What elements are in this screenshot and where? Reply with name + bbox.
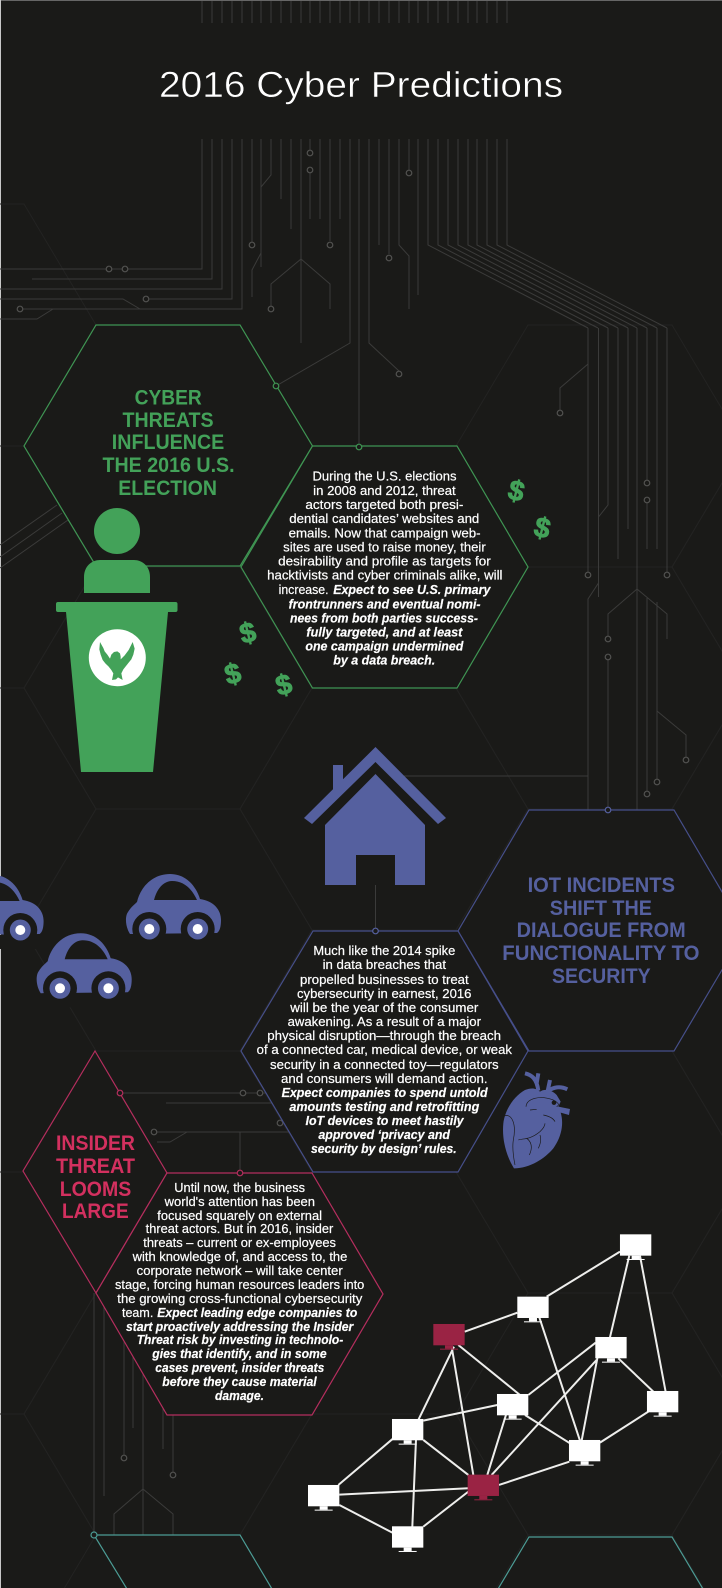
panel: insider threat body hexagon: threats – current or ex-employees [143, 1236, 336, 1250]
panel: teal hexagon right (cropped) [498, 1537, 703, 1588]
title: 2016 Cyber Predictions [159, 64, 563, 105]
panel: election body hexagon: During the U.S. elections [312, 470, 456, 484]
panel: IoT body hexagon: amounts testing and retrofitting [289, 1100, 480, 1114]
panel: IoT body hexagon: cybersecurity in earnest, 2016 [297, 987, 471, 1001]
panel: insider threat heading hexagon: LARGE [62, 1200, 129, 1223]
panel: IoT body hexagon: Much like the 2014 spike [313, 944, 455, 958]
panel: IoT heading hexagon: SHIFT THE [550, 897, 652, 920]
panel: insider threat body hexagon: before they cause material [162, 1375, 317, 1389]
panel: election body hexagon: frontrunners and eventual nomi- [289, 598, 481, 612]
panel: election heading hexagon: THREATS [122, 409, 214, 432]
panel: insider threat heading hexagon [23, 1051, 167, 1293]
panel: IoT heading hexagon: SECURITY [552, 965, 651, 988]
panel: election heading hexagon: INFLUENCE [112, 431, 224, 454]
panel: IoT heading hexagon: FUNCTIONALITY TO [502, 942, 700, 965]
panel: insider threat heading hexagon: THREAT [56, 1155, 135, 1178]
panel: election heading hexagon [24, 325, 312, 566]
panel: election heading hexagon: CYBER [135, 387, 202, 410]
icon: dollar signs [221, 474, 554, 702]
panel: IoT body hexagon: Expect companies to spend untold [282, 1086, 488, 1100]
panel: election body hexagon: nees from both parties success- [290, 612, 478, 626]
panel: election body hexagon: one campaign undermined [305, 640, 464, 654]
panel: insider threat body hexagon [96, 1170, 383, 1415]
icon: dollar signs: $ [236, 616, 259, 650]
panel: election body hexagon: desirability and profile as targets for [278, 555, 491, 569]
panel: election heading hexagon: THE 2016 U.S. [102, 454, 235, 477]
panel: insider threat body hexagon: Until now, the business [174, 1181, 305, 1195]
panel: insider threat body hexagon: focused squarely on external [157, 1209, 322, 1223]
panel: election body hexagon: emails. Now that campaign web- [289, 527, 481, 541]
panel: IoT body hexagon: approved ‘privacy and [318, 1128, 450, 1142]
icon: house [304, 747, 446, 885]
panel: election body hexagon [241, 444, 528, 688]
panel: insider threat body hexagon: the growing cross-functional cybersecurity [117, 1292, 363, 1306]
panel: IoT body hexagon: propelled businesses to treat [300, 973, 469, 987]
panel: insider threat body hexagon: cases prevent, insider threats [155, 1361, 324, 1375]
panel: election body hexagon: in 2008 and 2012, threat [313, 484, 456, 498]
panel: IoT body hexagon [241, 928, 528, 1172]
panel: insider threat body hexagon: world's attention has been [164, 1195, 315, 1209]
panel: insider threat body hexagon: threat actors. But in 2016, insider [146, 1222, 333, 1236]
panel: insider threat body hexagon: damage. [215, 1389, 264, 1403]
panel: insider threat body hexagon: Expect leading edge companies to [157, 1306, 358, 1320]
panel: insider threat body hexagon: stage, forcing human resources leaders into [115, 1278, 364, 1292]
icon: dollar signs: $ [505, 474, 528, 508]
icon: heart [503, 1073, 570, 1168]
panel: IoT heading hexagon: DIALOGUE FROM [517, 919, 686, 942]
panel: insider threat body hexagon: with knowledge of, and access to, the [132, 1250, 347, 1264]
panel: IoT body hexagon: physical disruption—through the breach [267, 1029, 501, 1043]
panel: election heading hexagon: ELECTION [118, 477, 217, 500]
panel: election body hexagon: sites are used to raise money, their [283, 541, 486, 555]
panel: election body hexagon: Expect to see U.S. primary [333, 583, 491, 597]
icon: speaker at podium [56, 508, 178, 772]
panel: IoT body hexagon: IoT devices to meet hastily [306, 1114, 465, 1128]
panel: IoT body hexagon: awakening. As a result of a major [288, 1015, 481, 1029]
panel: insider threat body hexagon: corporate network – will take center [137, 1264, 343, 1278]
panel: IoT body hexagon: in data breaches that [323, 958, 447, 972]
panel: election body hexagon: by a data breach. [333, 654, 435, 668]
panel: insider threat body hexagon: Threat risk by investing in technolo- [137, 1333, 343, 1347]
panel: IoT body hexagon: security by design’ rules. [311, 1142, 457, 1156]
panel: insider threat heading hexagon: LOOMS [60, 1178, 131, 1201]
panel: IoT body hexagon: of a connected car, medical device, or weak [257, 1043, 513, 1057]
icon: dollar signs: $ [272, 668, 295, 702]
panel: election body hexagon: increase. [279, 583, 329, 597]
panel: election body hexagon: actors targeted both presi- [305, 498, 463, 512]
network diagram of computers [308, 1234, 678, 1552]
panel: IoT body hexagon: and consumers will demand action. [281, 1072, 488, 1086]
panel: election body hexagon: fully targeted, and at least [306, 626, 463, 640]
panel: insider threat heading hexagon: INSIDER [56, 1132, 135, 1155]
icon: dollar signs: $ [221, 657, 244, 691]
panel: teal hexagon left (cropped) [91, 1532, 272, 1588]
panel: IoT heading hexagon: IOT INCIDENTS [528, 874, 675, 897]
icon: dollar signs: $ [531, 511, 554, 545]
panel: election body hexagon: hacktivists and cyber criminals alike, will [267, 569, 502, 583]
panel: insider threat body hexagon: gies that identify, and in some [151, 1347, 327, 1361]
icon: connected cars [0, 874, 221, 1007]
panel: insider threat body hexagon: team. [122, 1306, 153, 1320]
panel: IoT body hexagon: will be the year of the consumer [289, 1001, 478, 1015]
panel: insider threat body hexagon: start proactively addressing the Insider [126, 1320, 354, 1334]
panel: IoT heading hexagon [458, 807, 722, 1051]
panel: election body hexagon: dential candidates’ websites and [289, 512, 479, 526]
panel: IoT body hexagon: security in a connected toy—regulators [270, 1058, 499, 1072]
